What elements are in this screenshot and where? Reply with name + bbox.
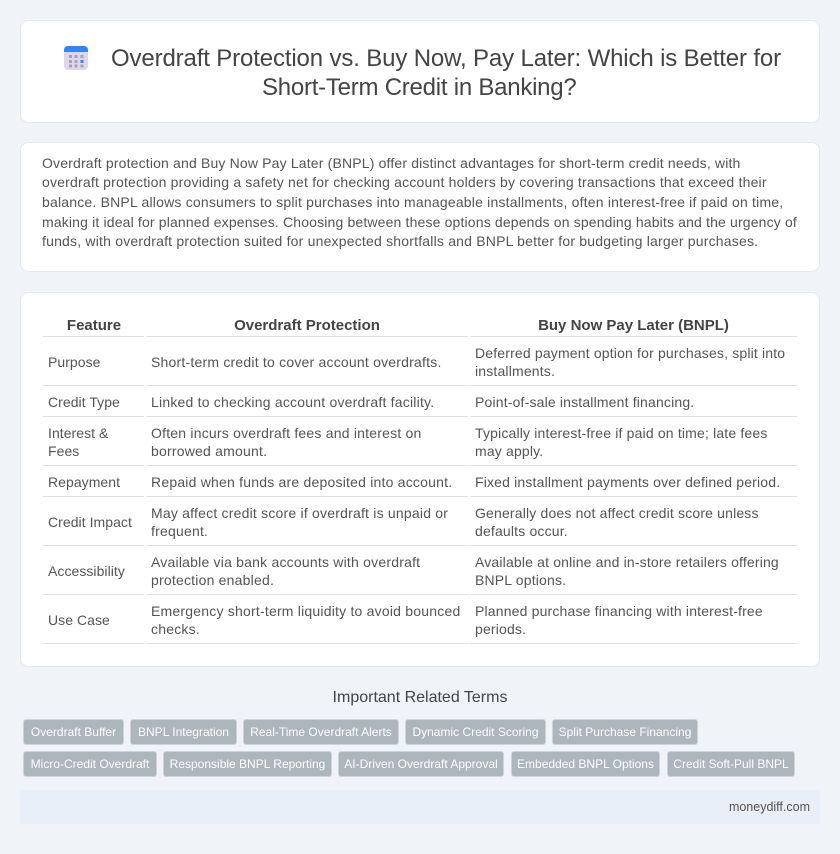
row: accessibility xyxy=(43,545,797,588)
row: credit type: Point-of-sale installment financing. xyxy=(475,394,694,410)
row: use case: Use Case xyxy=(48,612,110,628)
related terms tags: Split Purchase Financing xyxy=(559,725,691,739)
row: interest and fees: Fees xyxy=(48,443,79,459)
footer bar xyxy=(20,790,820,824)
row: use case: checks. xyxy=(151,621,200,637)
row: accessibility: BNPL options. xyxy=(475,572,566,588)
related terms tags: Micro-Credit Overdraft xyxy=(31,757,149,771)
row: use case xyxy=(43,594,797,644)
row: repayment: Fixed installment payments over defined period. xyxy=(475,474,780,490)
row: purpose: Short-term credit to cover account overdrafts. xyxy=(151,354,442,370)
table header row: Feature xyxy=(67,317,121,334)
related terms tags: AI-Driven Overdraft Approval xyxy=(344,757,498,771)
row: accessibility: Available at online and in-store retailers offering xyxy=(475,554,779,570)
row: purpose: Purpose xyxy=(48,354,100,370)
row: accessibility: protection enabled. xyxy=(151,572,274,588)
header panel xyxy=(20,20,820,123)
row: interest and fees: Often incurs overdraft fees and interest on xyxy=(151,425,422,441)
row: credit impact: Generally does not affect credit score unless xyxy=(475,505,759,521)
table header row: Buy Now Pay Later (BNPL) xyxy=(538,317,729,334)
row: credit impact xyxy=(43,496,797,539)
row: use case: Planned purchase financing with interest-free xyxy=(475,603,763,619)
related terms tags: Dynamic Credit Scoring xyxy=(412,725,539,739)
row: interest and fees: Typically interest-free if paid on time; late fees xyxy=(475,425,768,441)
intro text panel xyxy=(20,142,820,272)
row: repayment: Repayment xyxy=(48,474,120,490)
row: use case: Emergency short-term liquidity to avoid bounced xyxy=(151,603,460,619)
title xyxy=(111,45,781,101)
intro paragraph: overdraft protection providing a safety net for checking account holders by covering transactions that exceed their xyxy=(42,174,767,190)
icon: calendar xyxy=(64,46,88,70)
row: credit impact: frequent. xyxy=(151,523,208,539)
related terms heading: Important Related Terms xyxy=(333,689,507,706)
table header row xyxy=(67,317,729,334)
row: accessibility: Accessibility xyxy=(48,563,125,579)
row: credit impact: Credit Impact xyxy=(48,514,132,530)
row: purpose xyxy=(43,336,797,379)
row: credit type: Linked to checking account overdraft facility. xyxy=(151,394,434,410)
row: use case: periods. xyxy=(475,621,526,637)
related terms tags: Responsible BNPL Reporting xyxy=(170,757,325,771)
related terms tags: BNPL Integration xyxy=(138,725,229,739)
related terms tags xyxy=(23,719,795,777)
row: interest and fees: borrowed amount. xyxy=(151,443,267,459)
intro paragraph xyxy=(42,155,797,249)
comparison table panel xyxy=(20,292,820,667)
row: purpose: Deferred payment option for purchases, split into xyxy=(475,345,785,361)
intro paragraph: making it ideal for planned expenses. Choosing between these options depends on spending habits and the urgency of xyxy=(42,214,797,230)
row: credit type xyxy=(43,385,797,410)
related terms tags: Real-Time Overdraft Alerts xyxy=(250,725,392,739)
row: credit impact: defaults occur. xyxy=(475,523,568,539)
row: credit impact: May affect credit score if overdraft is unpaid or xyxy=(151,505,448,521)
footer site name: moneydiff.com xyxy=(729,800,810,814)
title: Overdraft Protection vs. Buy Now, Pay Later: Which is Better for xyxy=(111,45,781,72)
related terms tags: Credit Soft-Pull BNPL xyxy=(673,757,789,771)
title: Short-Term Credit in Banking? xyxy=(262,74,577,101)
intro paragraph: balance. BNPL allows consumers to split purchases into manageable installments, often interest-free if paid on time, xyxy=(42,194,783,210)
row: repayment xyxy=(43,465,797,490)
intro paragraph: funds, with overdraft protection suited for unexpected shortfalls and BNPL better for budgeting larger purchases. xyxy=(42,233,758,249)
row: interest and fees: Interest & xyxy=(48,425,108,441)
row: repayment: Repaid when funds are deposited into account. xyxy=(151,474,452,490)
table header row: Overdraft Protection xyxy=(234,317,380,334)
intro paragraph: Overdraft protection and Buy Now Pay Later (BNPL) offer distinct advantages for short-term credit needs, with xyxy=(42,155,740,171)
row: accessibility: Available via bank accounts with overdraft xyxy=(151,554,420,570)
row: interest and fees xyxy=(43,416,797,459)
related terms tags: Overdraft Buffer xyxy=(31,725,116,739)
row: purpose: installments. xyxy=(475,363,555,379)
row: interest and fees: may apply. xyxy=(475,443,543,459)
row: credit type: Credit Type xyxy=(48,394,120,410)
related terms tags: Embedded BNPL Options xyxy=(517,757,654,771)
